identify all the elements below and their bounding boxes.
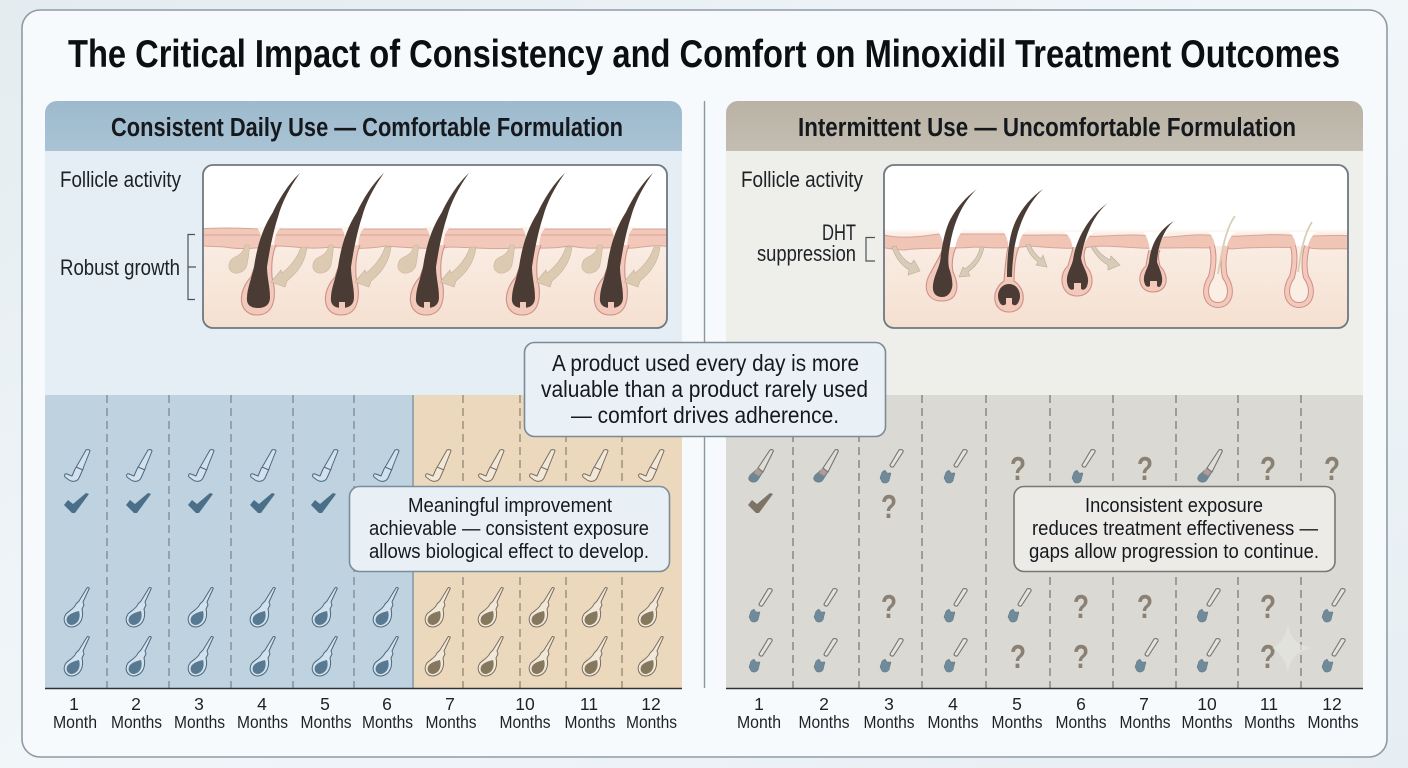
row four: applicators and unknowns: ? [1260, 638, 1276, 675]
icons: morning applicators [65, 450, 664, 481]
month axis: left: 1 [69, 694, 79, 714]
month axis: right: 1 [754, 694, 764, 714]
row three: applicators and unknowns [749, 588, 1345, 625]
month axis: right: Months [864, 712, 915, 732]
adherence chart: intermittent [726, 395, 1363, 688]
row three: applicators and unknowns: ? [881, 588, 897, 625]
header: intermittent use: Intermittent Use — Uncomfortable Formulation [798, 114, 1296, 142]
row four: applicators and unknowns: ? [1010, 638, 1026, 675]
month axis: right: 7 [1139, 694, 1149, 714]
callout: meaningful improvement [350, 486, 670, 572]
central callout: A product used every day is more [552, 350, 859, 376]
empty follicle five [1206, 246, 1230, 305]
row one: applicators and unknowns: ? [1260, 450, 1276, 487]
row one: applicators and unknowns: ? [1010, 450, 1026, 487]
arrows: DHT action [892, 244, 1120, 277]
follicle four [1140, 250, 1166, 292]
month axis: left: 3 [194, 694, 204, 714]
row three: applicators and unknowns: ? [1260, 588, 1276, 625]
central callout: — comfort drives adherence. [571, 402, 839, 428]
row three: applicators and unknowns: ? [1137, 588, 1153, 625]
follicle one [926, 247, 957, 301]
month axis: right: Month [737, 712, 781, 732]
row three: applicators and unknowns: ? [1073, 588, 1089, 625]
empty follicle six [1287, 246, 1311, 305]
month axis: left: Months [174, 712, 225, 732]
callout: inconsistent exposure [1014, 486, 1335, 572]
month axis: left: Month [53, 712, 97, 732]
month axis: right: 3 [884, 694, 894, 714]
panel: intermittent use [726, 101, 1363, 732]
month axis: right: 12 [1322, 694, 1342, 714]
month axis: right: 6 [1076, 694, 1086, 714]
month axis: right: 11 [1260, 694, 1278, 714]
row four: applicators and unknowns [749, 638, 1345, 675]
month axis: right: Months [1308, 712, 1359, 732]
row four: applicators and unknowns: ? [1073, 638, 1089, 675]
label: DHT suppression with bracket: suppression [757, 241, 856, 266]
month axis: right: Months [1120, 712, 1171, 732]
month axis: left: 5 [320, 694, 330, 714]
icons: droppers row one [64, 588, 663, 627]
month axis: left: 2 [131, 694, 141, 714]
follicle two [995, 247, 1023, 312]
adherence chart: consistent [45, 395, 682, 688]
follicle illustration: miniaturising [880, 165, 1352, 328]
row one: applicators and unknowns: ? [1137, 450, 1153, 487]
month axis: left: Months [500, 712, 551, 732]
month axis: left: Months [111, 712, 162, 732]
month axis: right: Months [798, 712, 850, 732]
month axis: left: Months [564, 712, 616, 732]
panel body left [45, 151, 682, 396]
month axis: right: Months [1182, 712, 1233, 732]
panel body right [726, 151, 1363, 396]
month axis: right: Months [1056, 712, 1107, 732]
center divider [704, 101, 706, 688]
central callout: valuable than a product rarely used [541, 376, 868, 402]
month axis: left: 6 [382, 694, 392, 714]
callout: inconsistent exposure: reduces treatment effectiveness — [1032, 518, 1318, 540]
central callout [524, 342, 886, 436]
icons: droppers row two [64, 637, 663, 676]
month axis: right: 4 [948, 694, 958, 714]
month axis: left: 7 [445, 694, 455, 714]
label: DHT suppression with bracket: DHT [822, 220, 856, 245]
month axis: right [737, 694, 1359, 732]
month axis: right: 10 [1197, 694, 1217, 714]
label: DHT suppression with bracket [757, 220, 875, 266]
month axis: right: Months [928, 712, 979, 732]
row two: check and unknown: ? [881, 488, 897, 525]
month axis: right: 5 [1012, 694, 1022, 714]
month axis: left [53, 694, 677, 732]
month axis: right: Months [992, 712, 1043, 732]
label: robust growth with bracket: Robust growth [60, 255, 180, 280]
month axis: right: 2 [819, 694, 829, 714]
month axis: left: 10 [515, 694, 535, 714]
label: robust growth with bracket [60, 234, 196, 300]
header: consistent daily use: Consistent Daily Use — Comfortable Formulation [111, 114, 623, 142]
month axis: left: Months [626, 712, 677, 732]
callout: meaningful improvement: Meaningful improvement [408, 495, 612, 517]
callout: inconsistent exposure: Inconsistent exposure [1085, 495, 1263, 517]
label: follicle activity: Follicle activity [60, 167, 181, 192]
row two: check and unknown [748, 488, 897, 525]
month axis: left: Months [426, 712, 477, 732]
callout: meaningful improvement: achievable — consistent exposure [369, 518, 649, 540]
row one: applicators and unknowns [749, 450, 1340, 487]
month axis: right: Months [1244, 712, 1295, 732]
callout: inconsistent exposure: gaps allow progression to continue. [1029, 541, 1319, 563]
header: intermittent use [726, 101, 1363, 151]
panel: consistent daily use [45, 101, 682, 732]
label: follicle activity: Follicle activity [741, 167, 863, 192]
follicle three [1062, 247, 1092, 296]
header: consistent daily use [45, 101, 682, 151]
month axis: left: Months [237, 712, 288, 732]
month axis: left: Months [300, 712, 352, 732]
month axis: left: 11 [580, 694, 598, 714]
month axis: left: 12 [641, 694, 661, 714]
sparkle mark [1272, 623, 1312, 673]
icons: check marks [64, 493, 336, 513]
follicle illustration: healthy [200, 165, 670, 328]
row one: applicators and unknowns: ? [1324, 450, 1340, 487]
month axis: left: 4 [257, 694, 267, 714]
callout: meaningful improvement: allows biological effect to develop. [369, 541, 649, 563]
month axis: left: Months [362, 712, 413, 732]
